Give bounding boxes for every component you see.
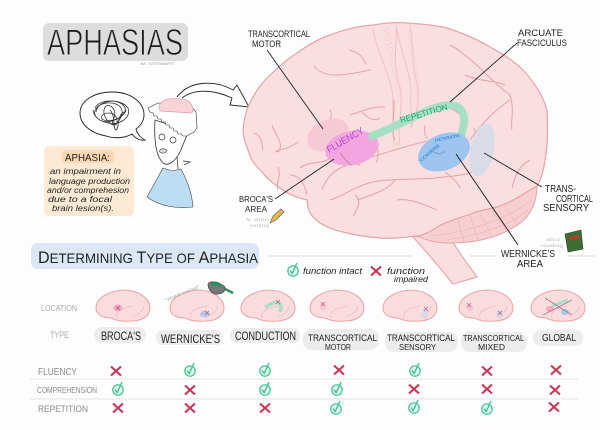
type pill: transcortical motor (303, 329, 379, 352)
mini brain: broca's (96, 290, 150, 321)
type pill: broca's: BROCA'S (101, 331, 141, 343)
brainstem (412, 236, 477, 284)
label: transcortical motor: TRANSCORTICAL (248, 29, 310, 39)
row labels: location and type: TYPE (50, 330, 69, 340)
type pill: global: GLOBAL (542, 332, 576, 344)
mini brain: transcortical motor (310, 290, 364, 321)
title: M. STEWART (141, 61, 175, 66)
label: transcortical sensory (484, 153, 593, 214)
type pill: transcortical motor: MOTOR (325, 342, 351, 352)
icon: book (565, 230, 583, 252)
mini brain: wernicke's (164, 284, 224, 321)
label: wernicke's area: reading (541, 243, 564, 248)
type pill: wernicke's (156, 330, 223, 346)
label: wernicke's area (456, 154, 564, 270)
row: repetition (38, 400, 559, 414)
type pill: transcortical sensory: SENSORY (399, 342, 436, 352)
label: transcortical motor (248, 29, 323, 129)
mini brain: conduction (241, 290, 295, 321)
region: fluency (322, 125, 382, 170)
icon: pencil (270, 209, 284, 223)
label: broca's area: AREA (245, 204, 267, 214)
label: transcortical sensory: TRANS- (545, 184, 576, 195)
row labels: location and type: LOCATION (41, 304, 77, 313)
panel: aphasia definition: language production (49, 177, 131, 186)
panel: aphasia definition (44, 146, 134, 216)
row: comprehension (37, 382, 560, 395)
panel: aphasia definition: an impairment in (50, 167, 122, 176)
label: transcortical motor: MOTOR (252, 39, 281, 49)
type pill: transcortical mixed: MIXED (478, 342, 505, 352)
row: fluency (38, 363, 561, 378)
motor and sensory cortex strips: SENSORY CORTEX (405, 27, 421, 98)
type pill: broca's (94, 327, 146, 343)
label: broca's area (239, 159, 334, 228)
icon: salad bowl (208, 282, 233, 294)
panel: aphasia definition: and/or comprehesion (47, 186, 130, 195)
type pill: transcortical mixed: TRANSCORTICAL (463, 333, 524, 343)
table: criteria by type (30, 363, 578, 414)
heading: determining type of aphasia: DETERMINING TYPE OF APHASIA (38, 248, 259, 267)
panel: aphasia definition: APHASIA: (65, 153, 110, 164)
motor and sensory cortex strips: MOTOR CORTEX (381, 27, 405, 100)
arrow from head to brain (177, 83, 249, 107)
mini brain: global (531, 290, 585, 321)
type pill: global (533, 330, 583, 346)
brain (243, 23, 548, 238)
label: wernicke's area: AREA (517, 259, 543, 270)
row labels: location and type (41, 304, 77, 340)
row: comprehension: COMPREHENSION (37, 385, 97, 395)
label: broca's area: BROCA'S (239, 194, 273, 204)
type pill: conduction (230, 328, 300, 343)
legend: function (387, 266, 425, 276)
type pill: wernicke's: WERNICKE'S (161, 332, 220, 346)
region: fluency: FLUENCY (325, 125, 367, 156)
motor and sensory cortex strips (373, 23, 421, 144)
type pill: conduction: CONDUCTION (235, 331, 296, 343)
mini brain: transcortical sensory (383, 290, 437, 321)
panel: aphasia definition: brain lesion(s). (52, 204, 114, 213)
region: comprehension (412, 125, 476, 179)
label: wernicke's area: also (546, 237, 561, 242)
icon: person with exposed brain (147, 98, 197, 208)
mini brain: transcortical mixed (459, 290, 513, 321)
type pill: transcortical sensory (385, 332, 458, 352)
icon: thought bubble with tangled scribble (80, 92, 145, 140)
label: broca's area: ↳ also (245, 217, 270, 222)
region: transcortical sensory (465, 121, 499, 179)
title: APHASIAS (47, 22, 183, 63)
row: repetition: REPETITION (38, 404, 88, 414)
cerebellum (415, 186, 537, 243)
region: comprehension: COMPRE (418, 143, 441, 163)
mini brain: wernicke's: "word salad" (164, 284, 201, 304)
panel: aphasia definition: due to a focal (48, 195, 112, 204)
label: arcuate fasciculus: ARCUATE (518, 28, 563, 39)
label: transcortical sensory: SENSORY (543, 203, 589, 214)
legend: function intact (303, 266, 363, 276)
region: repetition arcuate fasciculus (369, 102, 464, 137)
row: fluency: FLUENCY (38, 367, 77, 378)
label: wernicke's area: WERNICKE'S (501, 249, 555, 260)
sulci (254, 45, 530, 216)
region: comprehension: HENSION (434, 133, 460, 143)
label: arcuate fasciculus: FASCICULUS (517, 38, 567, 49)
legend (288, 263, 429, 284)
heading: determining type of aphasia (31, 243, 595, 269)
region: repetition arcuate fasciculus: REPETITION (399, 102, 449, 125)
region: transcortical motor (302, 112, 354, 158)
type pill: transcortical sensory: TRANSCORTICAL (387, 333, 455, 344)
type pill: transcortical motor: TRANSCORTICAL (308, 333, 377, 344)
type pill: transcortical mixed (461, 332, 527, 352)
legend: impaired (394, 275, 429, 284)
label: broca's area: writing (250, 223, 270, 228)
label: arcuate fasciculus (450, 28, 567, 102)
